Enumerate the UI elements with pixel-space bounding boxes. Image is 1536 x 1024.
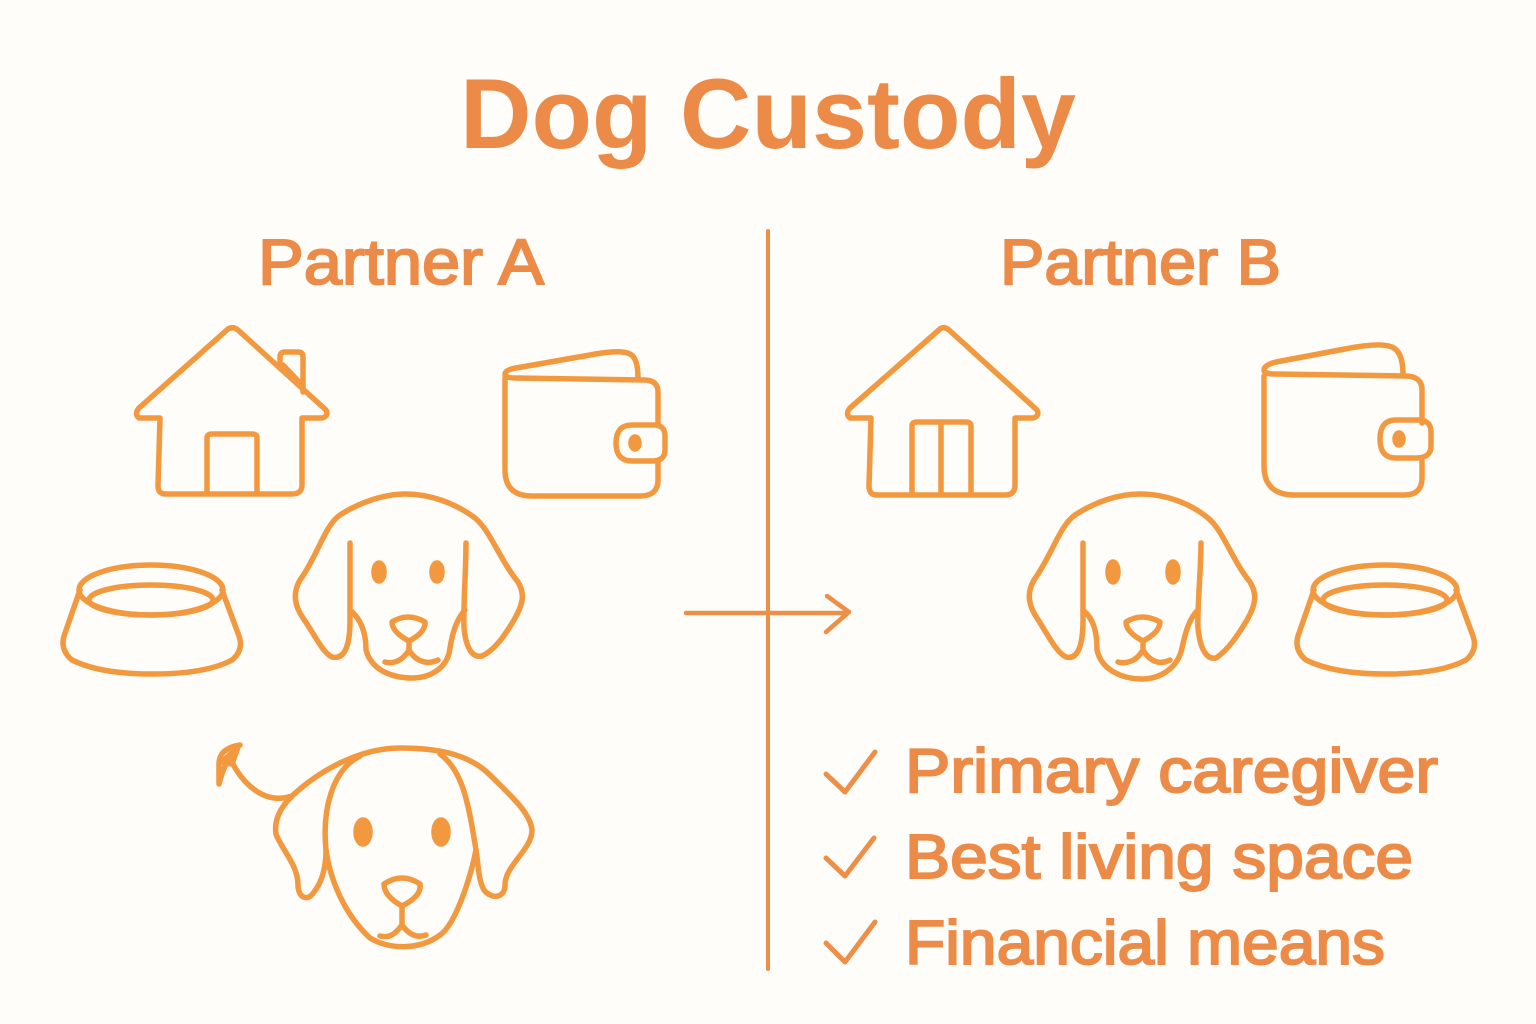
text: financial means: Financial means [905, 909, 1385, 978]
icon: bowl B [1297, 565, 1474, 674]
icon: dog face A [295, 494, 522, 678]
icon: check 1 [826, 752, 875, 792]
icon: dog face B [1029, 494, 1255, 679]
icon: check 2 [826, 838, 874, 876]
arrow: A to B [686, 596, 849, 632]
checklist [826, 737, 1438, 978]
icon: wallet B [1264, 345, 1431, 495]
text: best living space: Best living space [905, 823, 1413, 892]
heading: Partner A: Partner A [258, 226, 544, 298]
title: Dog Custody [460, 58, 1076, 169]
heading: Partner B: Partner B [1000, 226, 1281, 298]
center divider [766, 231, 770, 969]
text: primary caregiver: Primary caregiver [905, 737, 1438, 806]
icon: dog with tail [219, 745, 532, 947]
icon: wallet A [505, 352, 665, 496]
icon: bowl A [63, 565, 240, 674]
icon: check 3 [826, 922, 875, 962]
icon: house B [848, 328, 1038, 495]
icon: house A [136, 328, 327, 494]
